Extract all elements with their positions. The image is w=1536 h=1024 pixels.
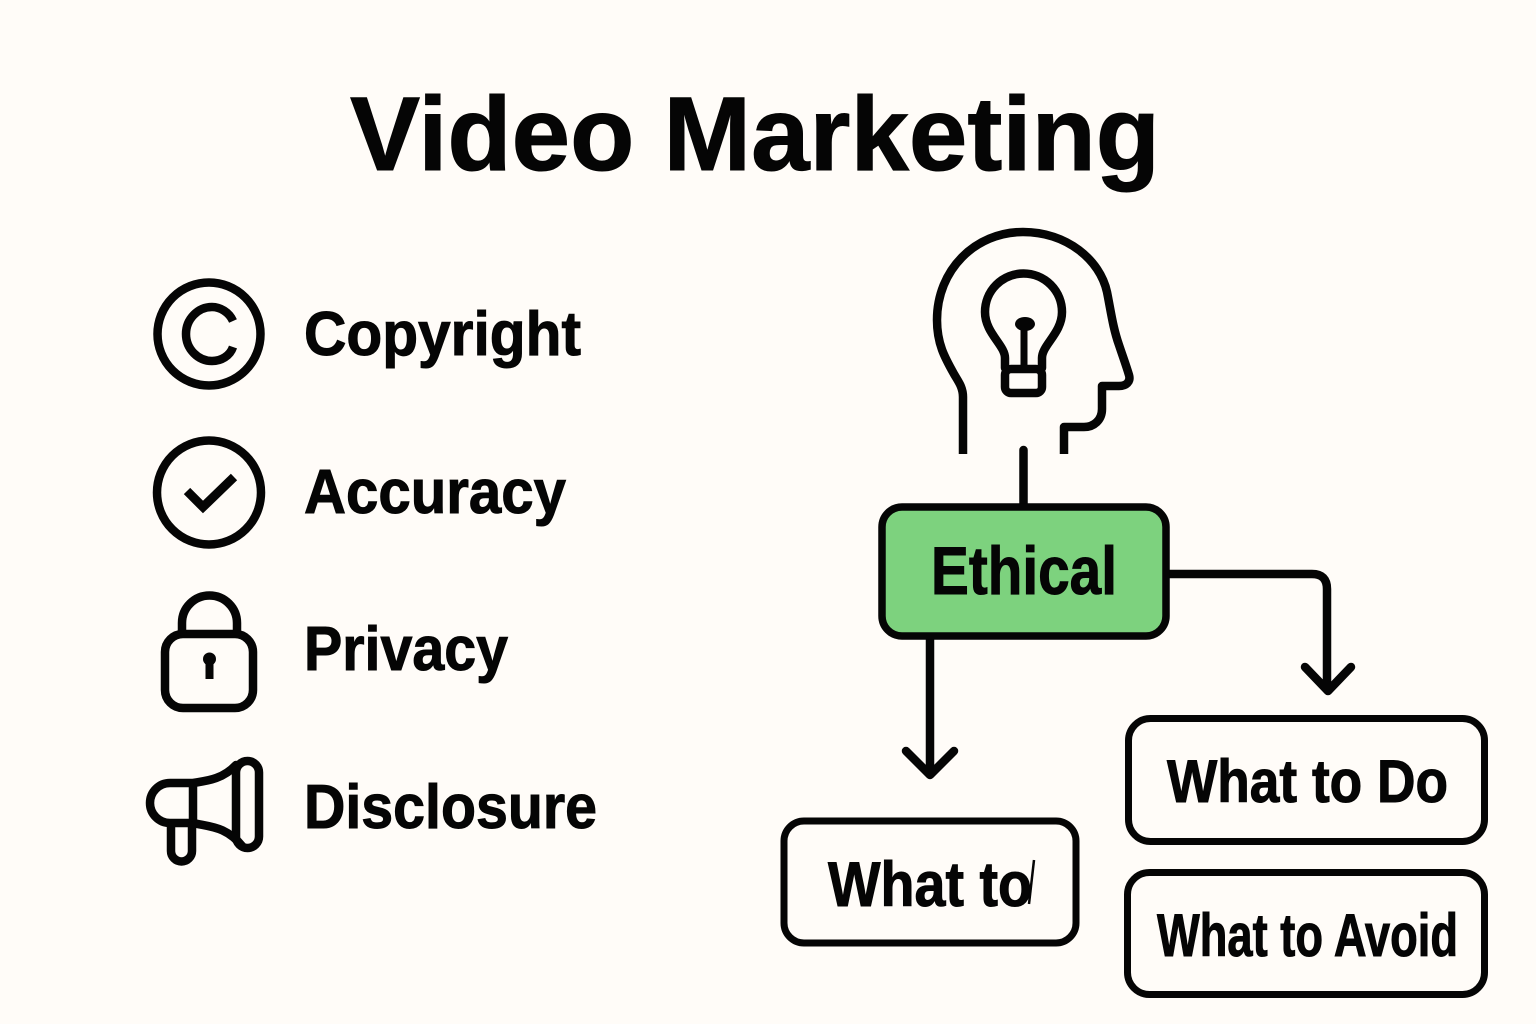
arrow: ethical to what to do	[1168, 574, 1351, 691]
label: privacy: Privacy	[304, 615, 508, 684]
icon: check mark circle	[157, 440, 261, 544]
arrow: ethical to what to	[906, 638, 954, 775]
label: disclosure: Disclosure	[304, 773, 597, 842]
icon: copyright symbol	[158, 282, 260, 386]
icon: megaphone	[150, 761, 259, 862]
icon: padlock	[165, 596, 253, 708]
box: what to do	[1128, 718, 1484, 842]
box: what to	[784, 821, 1076, 943]
label: copyright: Copyright	[304, 300, 581, 369]
label: what to: What to	[828, 850, 1032, 920]
title: Video Marketing	[350, 76, 1160, 193]
item: disclosure	[150, 761, 597, 862]
label: ethical: Ethical	[931, 533, 1117, 609]
label: accuracy: Accuracy	[304, 458, 566, 527]
box: what to avoid	[1128, 872, 1484, 994]
item: accuracy	[157, 440, 566, 544]
connector: head to ethical	[1019, 450, 1028, 506]
item: privacy	[165, 596, 508, 708]
icon: head with light bulb	[937, 232, 1129, 454]
item: copyright	[158, 282, 581, 386]
box: ethical	[882, 507, 1166, 636]
label: what to do: What to Do	[1167, 748, 1448, 815]
